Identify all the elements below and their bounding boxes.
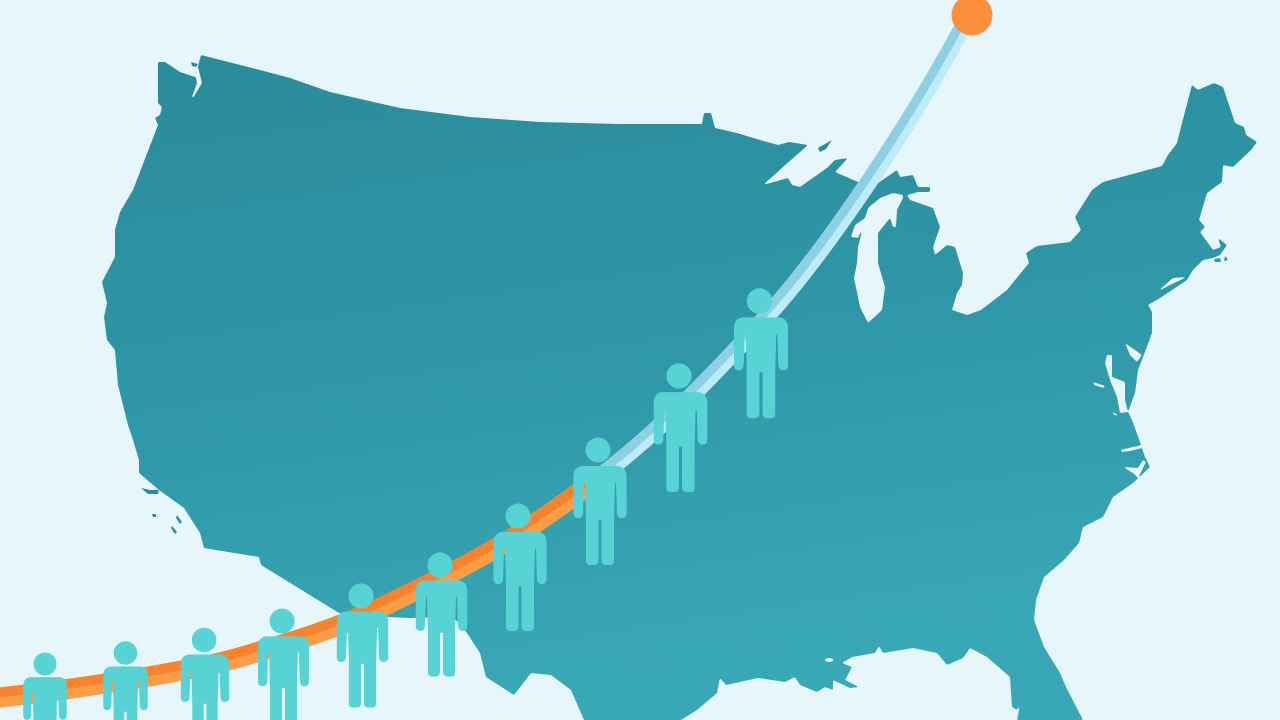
rising curve: blue section bbox=[587, 23, 964, 484]
new england islands bbox=[1214, 256, 1228, 262]
person 6 bbox=[416, 552, 467, 677]
orange endpoint dot bbox=[952, 0, 992, 36]
person 10 bbox=[734, 288, 788, 418]
person 4 bbox=[258, 609, 309, 720]
person 7 bbox=[494, 504, 546, 631]
person 3 bbox=[181, 628, 229, 720]
isle royale, san juan and small islands bbox=[191, 62, 832, 152]
channel islands bbox=[141, 488, 182, 534]
person 2 bbox=[103, 641, 148, 720]
person 9 bbox=[654, 363, 707, 492]
rising curve: orange section bbox=[0, 479, 590, 698]
person 1 bbox=[23, 653, 67, 720]
person 5 bbox=[337, 583, 388, 708]
row of people figures bbox=[23, 288, 788, 720]
person 8 bbox=[574, 438, 626, 565]
